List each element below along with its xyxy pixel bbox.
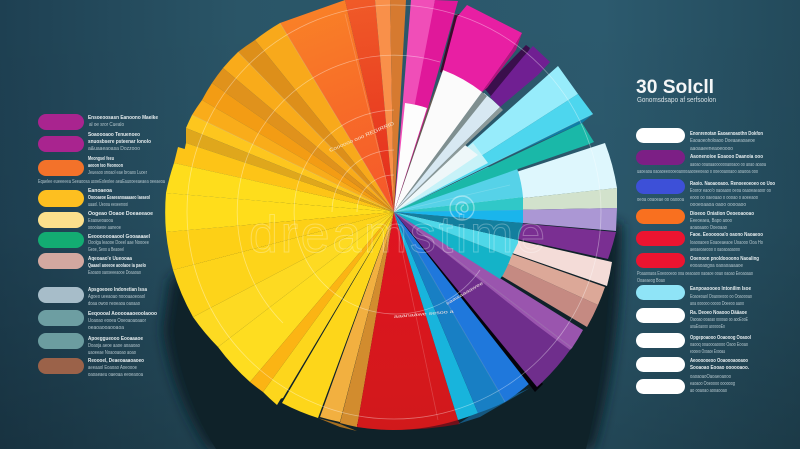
title: 30 Solcll (636, 76, 714, 98)
left entry 11: aeeaaol Eoaoao Aoeoooe (88, 365, 137, 371)
right entry 1: Eaoaoeoholoaoo Doeaaeaoaeoe (690, 138, 755, 144)
right entry 7: aoa oooooo ooooo Doeeoo aaoo (690, 301, 744, 307)
right entry 11: ao ooaoao aooaooao (690, 388, 727, 394)
left entry 2: snuosbsere psteenar lonolo (88, 139, 151, 145)
subtitle: Gonomsdsapo af serfsoolon (637, 95, 716, 104)
left entry 3 (38, 156, 147, 176)
right entry 2 (636, 150, 766, 168)
right note 2: oeoa ooaoeae oo oaoooa (637, 197, 684, 203)
left entry 4: Ooooaeoe Eeaeeanoaaaaeo laeaeol (88, 195, 150, 201)
right legend (636, 128, 775, 394)
left entry 11: Reoooel, Deaeoaaaoaoeo (88, 358, 144, 364)
right entry 9: Opgepoaooo Ooaooog Ooaool (690, 335, 751, 341)
left entry 9: oeaoaooaooaoa (88, 325, 124, 331)
right entry 2: aaoao ooaoaaooooooaooaoo oo aoao aoaoa (690, 162, 766, 168)
left entry 9: Uoaoao eooea Ooeoaoaoaaor (88, 318, 146, 324)
left entry 7: Aqeoaao'e Uueooaa (88, 256, 133, 262)
right entry 3: oooeoaaoa oaoo ooooaoo (690, 202, 746, 208)
right entry 4: Eeeoeaea, Bapo aooo (690, 218, 732, 224)
right entry 9: oaooq ooaoooaoooo Oaoo Eooao (690, 342, 748, 348)
right entry 3: Raoio. Naoaooaoo. Renoeeoeoeo oo Uoo (690, 181, 775, 187)
wedges: red and blues, bottom (357, 212, 583, 430)
left entry 6: Eeooooooaaool Gooaaaael (88, 234, 150, 240)
left note: Eqaelee eueeeeea Seeaoosa usoeEoleolee aeaEauooeeaeaea oeeaeoa (38, 179, 165, 185)
right entry 5 (636, 231, 763, 253)
left entry 3: Meongsel feeu (88, 156, 114, 162)
left entry 3: aeoon teo Heonoon (88, 163, 123, 169)
left entry 8: Apsgoeoeo Indonetian Issa (88, 287, 148, 293)
right entry 5: aeoaeoaeooo o oaoaoaoaooo (690, 247, 740, 253)
right entry 8 (636, 308, 748, 330)
wedges: yellows, left (165, 143, 394, 431)
left entry 10: uaoeeae Noaooaoao aoao (88, 350, 136, 356)
left entry 11 (38, 358, 144, 378)
right note 3: Poaaooaoa Eoeoooeoo ooa oeaoaoo oaoaoe ooao oaoao Eeoaoaao (637, 271, 753, 277)
left entry 3: Jeueaoo snoaol eae broaos Luoer (88, 170, 147, 176)
left entry 4: uaaol. Ueooa eeseenooi (88, 202, 128, 208)
right entry 9 (636, 333, 751, 355)
ring label: upper: Coooooo ooo REGIRRID (328, 121, 396, 154)
left entry 8: doaa owoo neoeaoa oaoaao (88, 301, 140, 307)
left entry 9: Eeqoooal Aooooaaoeoolaooo (88, 311, 158, 317)
left entry 7: Qaaael aoeeoe aoolaoe ia paelo (88, 263, 146, 269)
left entry 1: Ensoeoosasn Eanoono Maeike (88, 115, 158, 121)
left entry 8: Agoeo ueeaoao noooaaoeoaol (88, 294, 145, 300)
left legend (38, 114, 165, 378)
right entry 1: aaoaaeeneaoeoooo (690, 146, 733, 152)
left entry 10 (38, 333, 143, 356)
right entry 5: Faoe. Eeoooooa'o oaono Naoaeoo (690, 232, 763, 238)
left entry 1: al oe sror Cuealo (89, 122, 124, 128)
left entry 7 (38, 253, 146, 276)
left entry 6 (38, 232, 150, 253)
right entry 8: aoaEoaooo aoooooEo (690, 324, 725, 330)
right entry 11: eaoaoo Ooeoooo oooooog (690, 381, 735, 387)
wedges: cyan and teal, upper right (394, 66, 594, 212)
right entry 8: Ra. Deoeo Noaooo Dääaoe (690, 310, 747, 316)
left entry 2 (38, 132, 151, 152)
right entry 10: Aeoooooeoo Ooaoooaooaoo (690, 358, 748, 364)
right entry 3 (636, 179, 775, 208)
right entry 6: Ooenoon pnoldoooono Naoaling (690, 256, 759, 262)
left entry 11: oaoaeaeu oaeoaa eeoeaooa (88, 372, 143, 378)
left entry 4 (38, 188, 150, 208)
ring label: lower right: saawaaaawee (445, 280, 484, 306)
right entry 10: oaoaoaoOaoaeoaooo (690, 374, 731, 380)
right entry 4: aoaoaaoo Ooeoaao (690, 225, 727, 231)
right entry 9: eoooeo Oooaoe Eoooaa (690, 349, 725, 355)
left entry 10: Doaoja aeoe aaoe aoaaoao (88, 343, 140, 349)
pie chart (165, 0, 617, 431)
wedges: pinks and teal, lower right (394, 212, 612, 327)
right entry 7 (636, 285, 752, 307)
left entry 5 (38, 211, 153, 231)
right entry 4 (636, 209, 754, 231)
right entry 3: Eooror eaoo'o oaoaaoo oeoa oaaoeaeaoor oo (690, 188, 771, 194)
right entry 7: Eoaoeoaol Ooaooeooo oo Ooaoooao (690, 294, 752, 300)
left entry 1 (38, 114, 158, 130)
wedges: purple and magenta, top (394, 0, 550, 212)
right entry 5: Ioaooaoeo Eoaoeaeaoe Uoaooo Ooa Ho (690, 240, 763, 246)
ring label: lower: aaanaawe sesoo a (394, 309, 455, 319)
left entry 7: Eaoaoo saoseeeaooe Doaaoao (88, 270, 141, 276)
right note 4: Ooaeaeog Boao (637, 278, 665, 284)
right entry 3: eooo oo oaeoaao o oooao o aoeeaoo (690, 195, 758, 201)
left entry 2: a&uaaeaoasa Dozzooo (88, 146, 140, 152)
left entry 8 (38, 287, 148, 307)
left entry 9 (38, 310, 158, 331)
right entry 6: eooaoaogoa oaoaoaaaaoe (690, 263, 743, 269)
wedges: pastel fan, right (394, 143, 617, 259)
left entry 5: Esasueoaooa (88, 218, 113, 224)
left entry 10: Apoeggueooo Eooaaaoe (88, 336, 143, 342)
left entry 6: Ooolga leaooe Doeel aae Noooee (88, 240, 149, 246)
right entry 1 (636, 128, 763, 152)
wedges: oranges, upper left (186, 0, 406, 212)
right entry 10 (636, 357, 749, 380)
right entry 7: Eanpoaoooeo Intonilim Isoe (690, 286, 751, 292)
right entry 1: Enonrenotan Eaoaenoaothn Dokfon (690, 131, 763, 137)
watermark spiral icon (450, 196, 474, 220)
right entry 4: Dioeoo Oniation Oeoeoaooao (690, 211, 754, 217)
right entry 2: Aaonenoioe Eoaooo Daanoia ooo (690, 154, 763, 160)
left entry 5: Oogeao Ooaoe Doeaeeaoe (88, 211, 153, 217)
right entry 6 (636, 253, 759, 269)
watermark word: dreamstime (249, 206, 545, 264)
right entry 11 (636, 379, 735, 394)
left entry 6: Geoe, Seoo a Beaoeel (88, 247, 124, 253)
right note 1: uaoeaoa oaoaoeeoooeoaoooaaooeeoeao o ooeooaooaoo aoaooa ooo (637, 169, 758, 175)
left entry 5: soooiaeoe aaneoe (88, 225, 121, 231)
left entry 4: Eanoaeoa (88, 188, 113, 194)
right entry 8: Oaooao ooaoao ooooao oo aooEooE (690, 317, 748, 323)
concentric rings (187, 5, 601, 420)
left entry 2: Soaoooaoo Tenuenoeo (88, 132, 140, 138)
right entry 10: Sooaoao Eooao oooooaoo. (690, 365, 749, 371)
